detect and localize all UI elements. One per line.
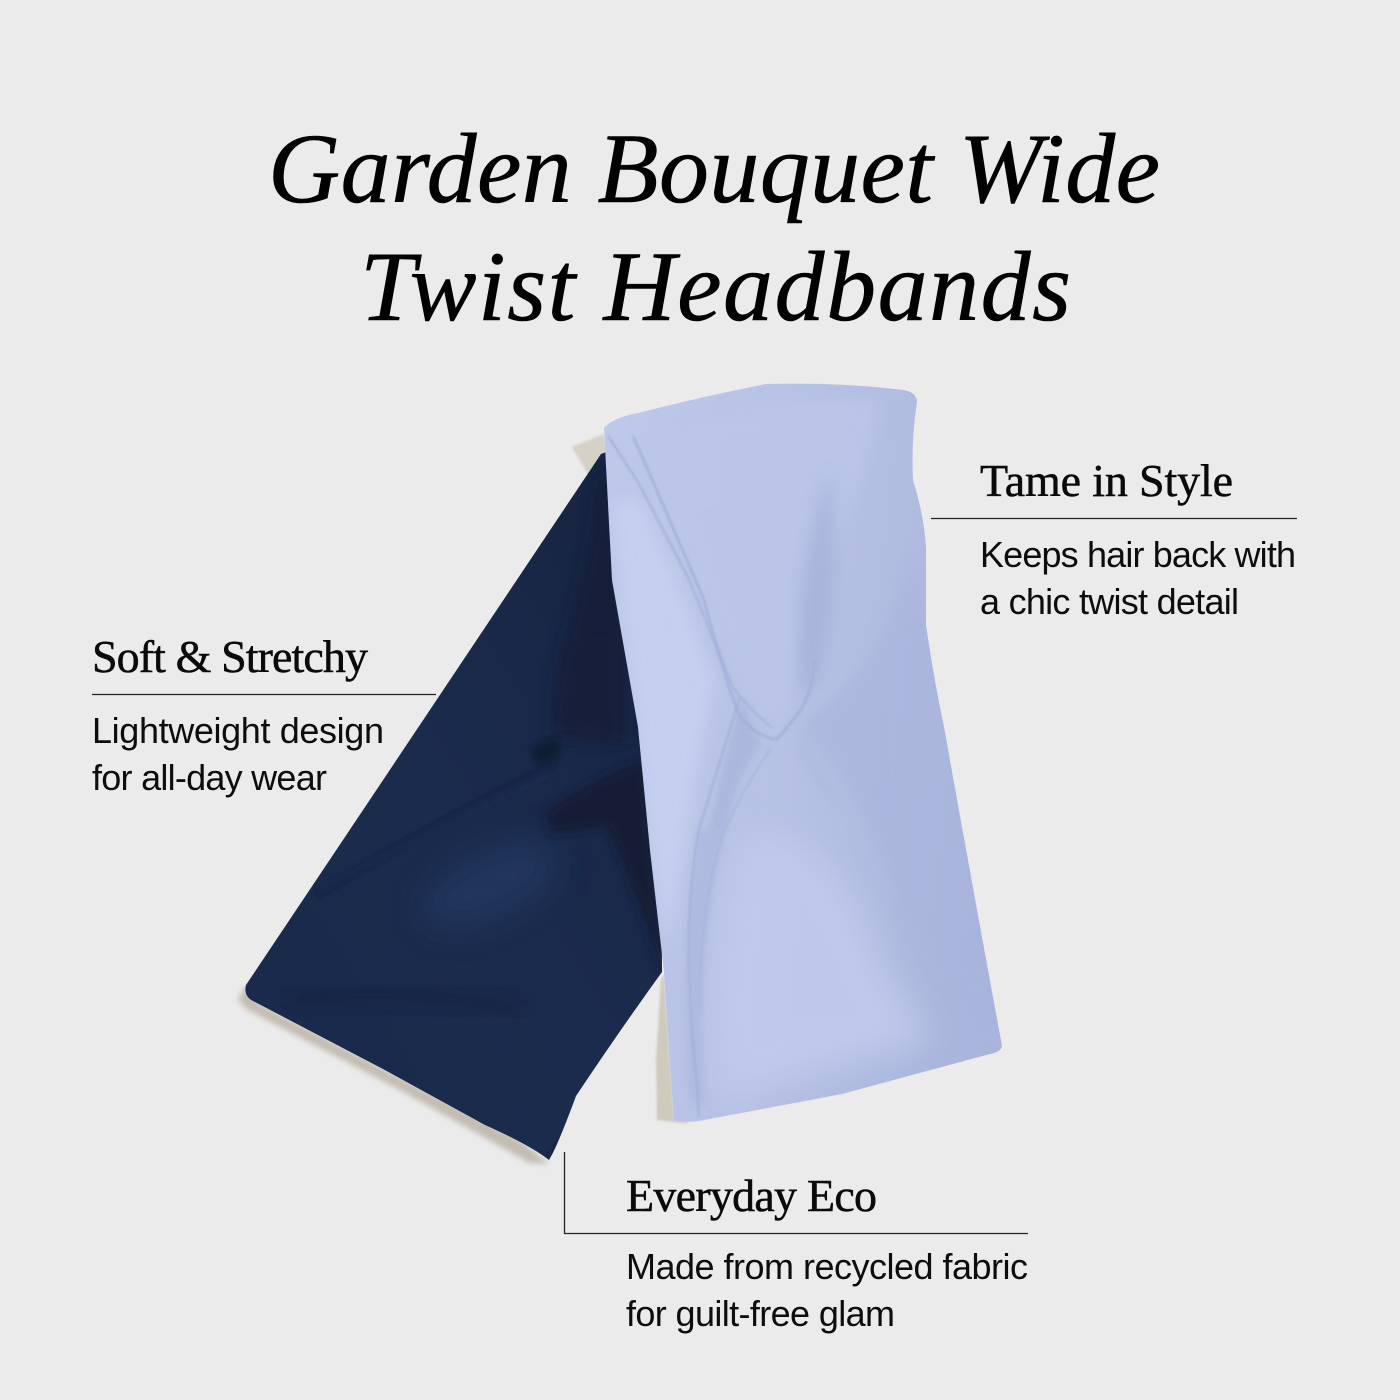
- infographic canvas: [92, 132, 1297, 1334]
- callout: Tame in Style: Tame in Style: [980, 455, 1233, 506]
- callout: Everyday Eco: Everyday Eco: [626, 1170, 877, 1221]
- title: [268, 113, 1160, 342]
- callout: Tame in Style: [931, 455, 1297, 622]
- product photo: two twist headbands: [230, 375, 1015, 1170]
- navy flap highlight: [428, 843, 553, 926]
- crease shadows: [798, 492, 835, 684]
- callout: Soft & Stretchy: [92, 631, 436, 798]
- upper flap highlight: [660, 400, 880, 738]
- fold lines: [633, 436, 776, 740]
- callout: Soft & Stretchy: for all-day wear: [92, 757, 327, 798]
- navy dark folds: [552, 494, 624, 742]
- callout: Everyday Eco: for guilt-free glam: [626, 1293, 895, 1334]
- title: Garden Bouquet Wide: [268, 113, 1160, 224]
- callout: Tame in Style: a chic twist detail: [980, 581, 1239, 622]
- navy headband: [245, 452, 662, 1160]
- callout: Soft & Stretchy: Soft & Stretchy: [92, 631, 368, 682]
- callout: Everyday Eco: Made from recycled fabric: [626, 1246, 1028, 1287]
- light blue headband: [590, 375, 1015, 1130]
- lower body highlight: [731, 848, 920, 1078]
- title: Twist Headbands: [360, 231, 1071, 342]
- callout: Everyday Eco: [564, 1152, 1028, 1334]
- callout: Soft & Stretchy: Lightweight design: [92, 710, 384, 751]
- cast shadows: [238, 434, 690, 1164]
- callout: Tame in Style: Keeps hair back with: [980, 534, 1296, 575]
